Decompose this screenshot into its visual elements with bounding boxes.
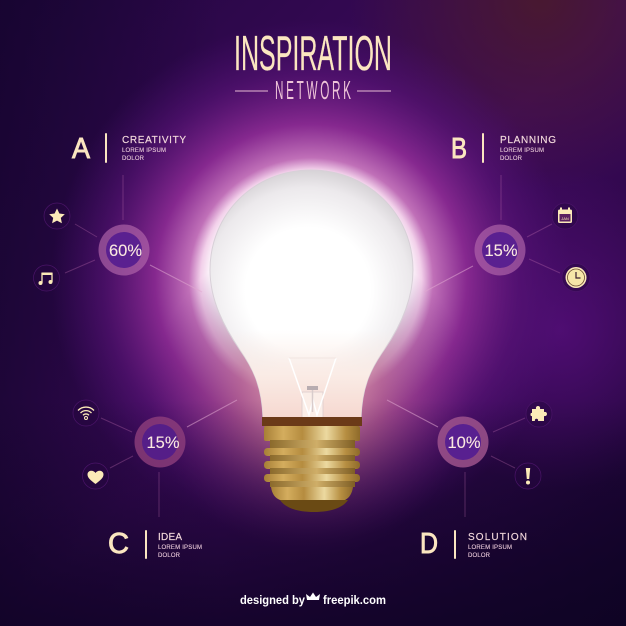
panel: D solution: DOLOR (468, 553, 491, 559)
panel: D solution (387, 400, 552, 560)
percentage: 15%: 15% (484, 242, 518, 260)
panel: C idea: IDEA (158, 532, 182, 543)
icon: clock (562, 264, 590, 292)
panel: C idea: DOLOR (158, 553, 181, 559)
percentage: 60%: 60% (109, 242, 142, 260)
panel: A creativity: LOREM IPSUM (122, 148, 166, 154)
title: INSPIRATION (234, 27, 392, 81)
icon: heart (82, 463, 108, 489)
panel: B planning: DOLOR (500, 156, 523, 162)
panel: D solution: SOLUTION (468, 532, 527, 543)
panel: A creativity: CREATIVITY (122, 135, 186, 146)
panel: A creativity: DOLOR (122, 156, 145, 162)
panel: C idea (73, 400, 237, 560)
percentage: 15% (474, 224, 526, 276)
panel: B planning: B (451, 133, 467, 165)
panel: B planning: LOREM IPSUM (500, 148, 544, 154)
icon: puzzle (526, 401, 552, 427)
panel: B planning: PLANNING (500, 135, 556, 146)
icon: exclamation (515, 463, 541, 489)
panel: B planning (424, 133, 590, 292)
footer credit: designed by (240, 595, 306, 607)
icon: star (44, 203, 70, 229)
icon: crown (306, 592, 320, 600)
footer credit: freepik.com (323, 595, 386, 607)
subtitle: NETWORK (275, 77, 354, 105)
panel: D solution: LOREM IPSUM (468, 545, 512, 551)
title (234, 27, 392, 105)
icon: wifi (73, 400, 99, 426)
light bulb (210, 170, 413, 512)
percentage: 60% (98, 224, 150, 276)
percentage: 15%: 15% (146, 434, 180, 452)
panel: C idea: LOREM IPSUM (158, 545, 202, 551)
panel: C idea: C (108, 528, 129, 560)
filament (289, 358, 336, 418)
icon: calendar: JAN (561, 216, 569, 221)
icon: music (34, 265, 60, 291)
icon: calendar (552, 203, 578, 229)
percentage: 10%: 10% (447, 434, 481, 452)
footer credit (240, 592, 386, 607)
panel: D solution: D (420, 528, 438, 560)
panel: A creativity: A (72, 133, 91, 165)
panel: A creativity (34, 133, 202, 292)
screw base (262, 417, 362, 512)
bulb glass (210, 170, 413, 418)
percentage: 10% (438, 416, 488, 468)
percentage: 15% (134, 416, 186, 468)
